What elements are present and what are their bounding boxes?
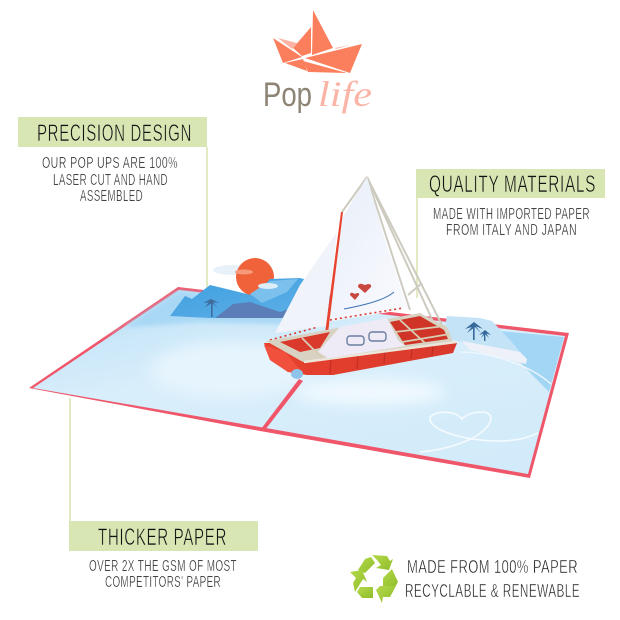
heading: thicker paper	[69, 521, 258, 551]
text: precision design body: OUR POP UPS ARE 100%	[42, 155, 178, 172]
hearts on sail	[350, 284, 371, 300]
hull ribs	[330, 345, 433, 374]
water heart trail	[420, 412, 538, 452]
heading: thicker paper: THICKER PAPER	[98, 524, 227, 551]
wordmark: life	[318, 74, 372, 114]
logo: Poplife	[263, 10, 372, 114]
wordmark	[263, 74, 372, 114]
callout: thicker paper	[69, 521, 258, 591]
mast	[324, 212, 343, 341]
dotted trim	[330, 308, 403, 320]
sailboat	[264, 177, 457, 375]
icon: palm tree	[203, 299, 219, 317]
heading: precision design: PRECISION DESIGN	[37, 120, 192, 147]
stays	[342, 177, 443, 328]
icon: recycling symbol	[350, 555, 398, 603]
text: thicker paper body: COMPETITORS' PAPER	[105, 574, 221, 591]
text: precision design body: ASSEMBLED	[80, 188, 143, 205]
pop-up card illustration	[29, 177, 569, 478]
wave splash	[291, 369, 303, 379]
text: quality materials body	[433, 206, 590, 239]
icon: palm trees	[465, 322, 491, 341]
sun	[213, 258, 274, 296]
cabin	[318, 318, 405, 358]
text: precision design body	[42, 155, 178, 205]
callout connector lines	[69, 147, 418, 521]
callout: quality materials	[416, 169, 605, 239]
wordmark: Pop	[263, 76, 312, 114]
main sail	[327, 177, 408, 322]
island with palms	[443, 316, 527, 364]
text: thicker paper body: OVER 2X THE GSM OF MOST	[89, 558, 237, 575]
text: thicker paper body	[89, 558, 237, 591]
card base	[29, 287, 569, 478]
text: precision design body: LASER CUT AND HAND	[53, 172, 168, 189]
icon: origami paper boat	[273, 10, 362, 73]
callout: precision design	[18, 117, 207, 205]
text: recycling message	[405, 557, 580, 601]
heading: precision design	[18, 117, 207, 147]
jib sail	[275, 232, 337, 333]
hull	[264, 343, 457, 375]
deck	[266, 313, 453, 362]
mountains	[170, 278, 330, 318]
